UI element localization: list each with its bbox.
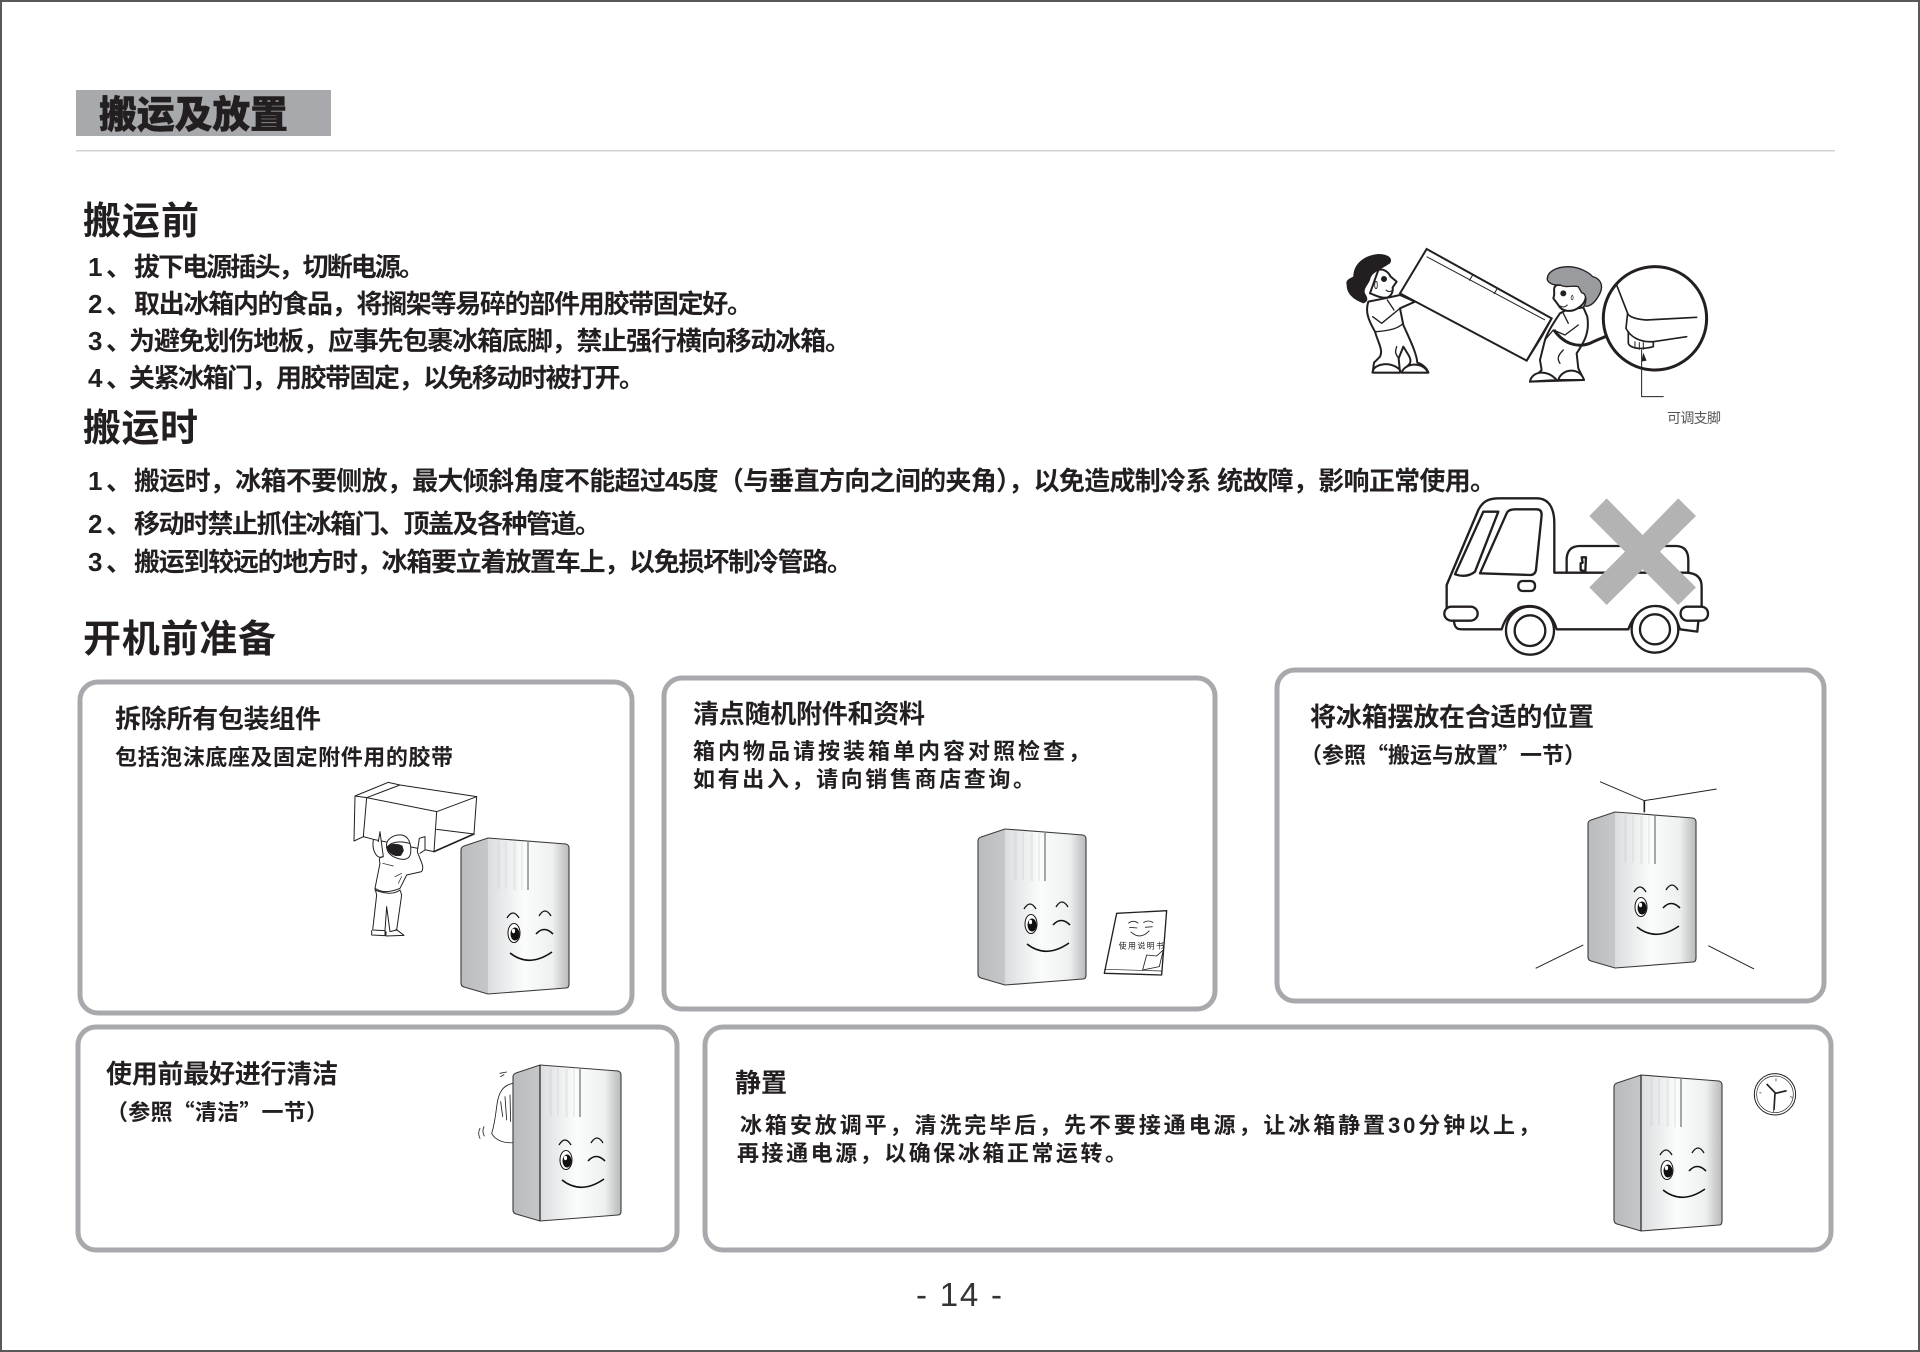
text block: before moving steps: 、: [106, 326, 132, 356]
icon: user manual: [1104, 911, 1167, 975]
panel text: （参照“搬运与放置”一节）: [1300, 738, 1586, 770]
panel heading: 清点随机附件和资料: [693, 699, 925, 729]
text block: before moving steps: 2: [88, 289, 102, 319]
icon: smiling fridge: [1614, 1075, 1722, 1231]
text block: before moving steps: 4: [88, 363, 102, 393]
panel: check accessories: [664, 678, 1215, 1009]
section: before moving: [83, 201, 851, 395]
panel text: 再接通电源，以确保冰箱正常运转。: [737, 1136, 1127, 1168]
panel heading: 静置: [735, 1068, 787, 1098]
icon: smiling fridge: [513, 1065, 621, 1221]
text block: during moving steps: [88, 461, 1496, 579]
text block: before moving steps: 、: [106, 363, 132, 393]
section: during moving: [83, 408, 1496, 579]
icon: smiling fridge: [1588, 812, 1696, 968]
text block: during moving steps: 、: [106, 466, 132, 496]
text block: before moving steps: 为避免划伤地板，应事先包裹冰箱底脚，禁止强行横向移动冰箱。: [129, 321, 851, 358]
icon: cleaning cloth: [479, 1072, 513, 1143]
panel: clean before use: [78, 1027, 677, 1250]
heading: during moving: 搬运时: [83, 408, 198, 450]
icon: smiling fridge: [978, 829, 1086, 985]
panel text: 冰箱安放调平，清洗完毕后，先不要接通电源，让冰箱静置30分钟以上，: [740, 1108, 1540, 1140]
text block: during moving steps: 1: [88, 466, 102, 496]
text block: before moving steps: 拔下电源插头，切断电源。: [134, 247, 425, 284]
text block: before moving steps: 1: [88, 252, 102, 282]
text block: before moving steps: 、: [106, 252, 132, 282]
text block: before moving steps: 、: [106, 289, 132, 319]
panel text: （参照“清洁”一节）: [106, 1095, 328, 1127]
panel text: [737, 1108, 1540, 1168]
title bar: 搬运及放置: [99, 95, 288, 137]
icon: room corner lines: [1536, 782, 1754, 969]
text block: before moving steps: 取出冰箱内的食品，将搁架等易碎的部件用胶带固定好。: [134, 284, 753, 321]
panel: remove packaging: [80, 682, 632, 1013]
page number: - 14 -: [916, 1276, 1002, 1313]
icon: user manual: 使用说明书: [1119, 941, 1164, 951]
panel heading: 使用前最好进行清洁: [106, 1059, 338, 1089]
heading: before moving: 搬运前: [83, 201, 199, 243]
panel text: 如有出入，请向销售商店查询。: [693, 762, 1035, 794]
illustration: truck with prohibited cross: [1444, 498, 1708, 655]
panel text: [693, 734, 1090, 794]
text block: during moving steps: 、: [106, 509, 132, 539]
panel: let stand: [705, 1027, 1831, 1250]
heading: preparation before start-up: 开机前准备: [83, 619, 276, 661]
title bar: [76, 90, 331, 137]
text block: during moving steps: 搬运到较远的地方时，冰箱要立着放置车上，以免损坏制冷管路。: [134, 542, 853, 579]
text block: during moving steps: 3: [88, 547, 102, 577]
panel text: 包括泡沫底座及固定附件用的胶带: [115, 745, 453, 770]
text block: during moving steps: 2: [88, 509, 102, 539]
illustration: two people carrying fridge with adjustable foot detail: [1346, 249, 1707, 397]
panel heading: 拆除所有包装组件: [115, 704, 321, 734]
panel text: 箱内物品请按装箱单内容对照检查，: [693, 734, 1090, 766]
text block: during moving steps: 搬运时，冰箱不要侧放，最大倾斜角度不能超过45度（与垂直方向之间的夹角），以免造成制冷系 统故障，影响正常使用。: [134, 461, 1496, 498]
icon: worker lifting box: [354, 782, 477, 936]
text block: before moving steps: 关紧冰箱门，用胶带固定，以免移动时被打开。: [129, 358, 645, 395]
text block: before moving steps: 3: [88, 326, 102, 356]
panel: choose location: [1277, 670, 1824, 1001]
icon: smiling fridge: [461, 838, 569, 994]
panel heading: 将冰箱摆放在合适的位置: [1310, 702, 1594, 732]
text block: before moving steps: [88, 247, 851, 395]
text block: during moving steps: 移动时禁止抓住冰箱门、顶盖及各种管道。: [134, 509, 601, 539]
text block: during moving steps: 、: [106, 547, 132, 577]
label: adjustable foot: 可调支脚: [1667, 410, 1721, 426]
icon: clock: [1754, 1074, 1796, 1115]
